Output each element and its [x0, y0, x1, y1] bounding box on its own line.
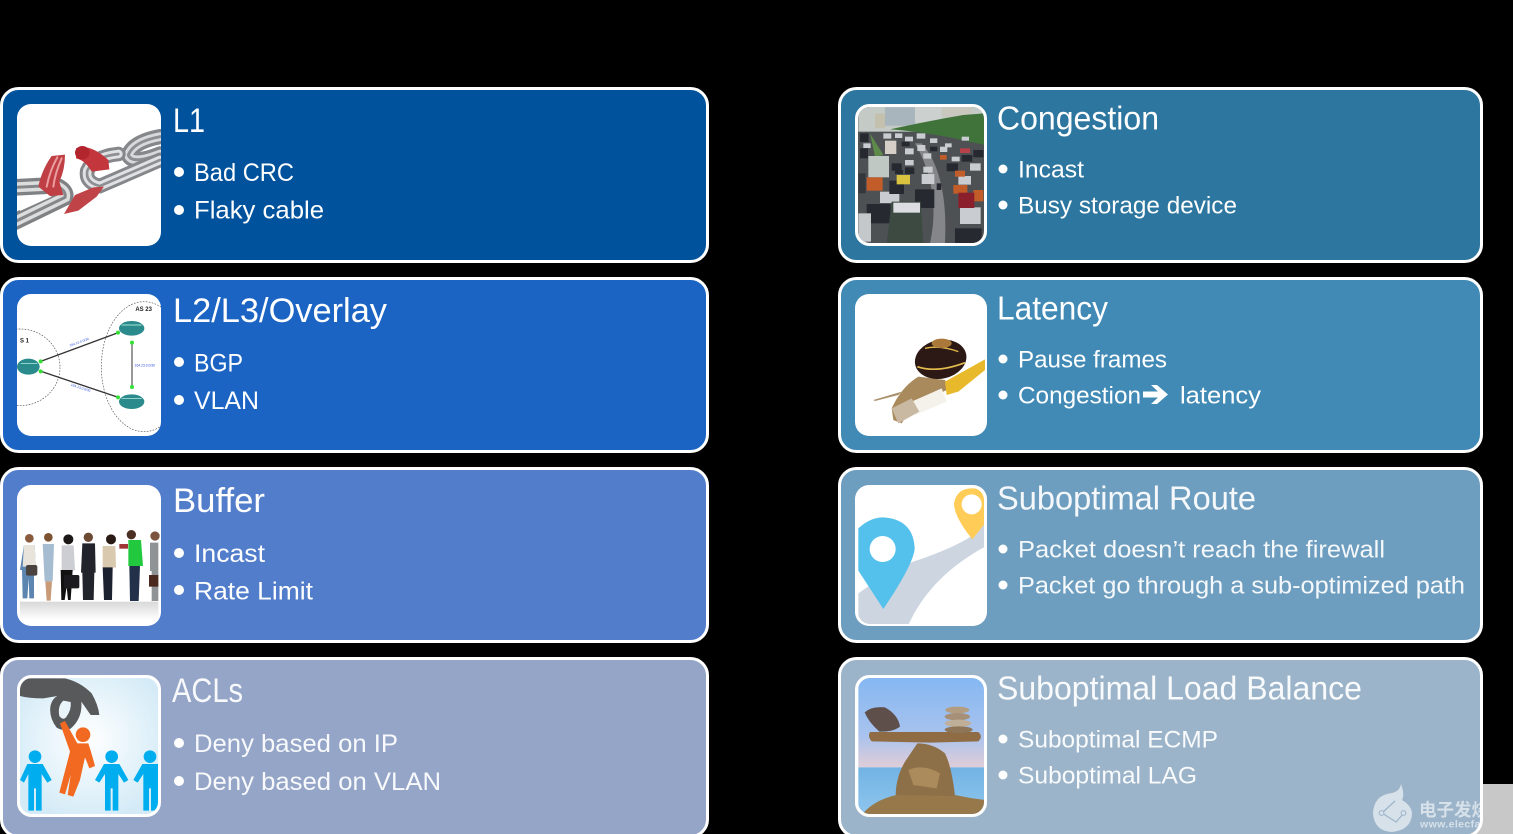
L2/L3 image: BGP network diagram: AS 23	[135, 307, 153, 313]
Congestion bullet list: Busy storage device	[1018, 192, 1237, 220]
L2/L3 image: BGP network diagram	[17, 294, 161, 436]
Latency image: snail on a network cable	[855, 294, 987, 436]
Suboptimal Route bullet list	[998, 536, 1465, 600]
Suboptimal Load Balance image: balanced rocks	[856, 676, 986, 816]
L2/L3 bullet list	[174, 350, 259, 415]
ACLs bullet list	[174, 730, 441, 796]
L2/L3 image: BGP network diagram: 164.13.0.0/30	[70, 383, 91, 393]
Buffer bullet list	[174, 540, 313, 606]
Suboptimal Load Balance title: Suboptimal Load Balance	[997, 670, 1362, 706]
Suboptimal Route card background	[840, 468, 1482, 642]
L1 bullet list: Flaky cable	[194, 196, 324, 224]
Latency card background	[840, 278, 1482, 452]
watermark text: 电子发烧友	[1419, 800, 1506, 820]
L2/L3 card background	[2, 278, 708, 452]
Latency bullet list: latency	[1180, 382, 1261, 410]
L2/L3 bullet list: BGP	[194, 350, 243, 378]
Latency bullet list: Congestion	[1018, 382, 1141, 410]
Buffer bullet list: Rate Limit	[194, 578, 313, 606]
panel: Congestion	[840, 88, 1482, 262]
L2/L3 title: L2/L3/Overlay	[173, 292, 387, 330]
L1 title: L1	[173, 102, 205, 140]
Suboptimal Load Balance card background	[840, 658, 1482, 834]
Congestion title: Congestion	[997, 100, 1159, 136]
L2/L3 image: BGP network diagram: 164.12.0.0/30	[69, 337, 90, 348]
Congestion bullet list	[998, 156, 1237, 220]
ACLs bullet list: Deny based on IP	[194, 730, 398, 758]
L1 card background	[2, 88, 708, 262]
Suboptimal Load Balance bullet list: Suboptimal ECMP	[1018, 726, 1218, 754]
panel: ACLs	[2, 658, 708, 834]
Buffer title: Buffer	[173, 482, 265, 520]
panel: Buffer	[2, 468, 708, 642]
L2/L3 bullet list: VLAN	[194, 387, 259, 415]
Latency bullet list	[998, 346, 1261, 410]
panel: Suboptimal Route	[840, 468, 1482, 642]
L1 bullet list	[174, 159, 324, 224]
Congestion image: traffic jam	[856, 106, 986, 244]
Latency bullet list: Pause frames	[1018, 346, 1167, 374]
Congestion bullet list: Incast	[1018, 156, 1084, 184]
Congestion card background	[840, 88, 1482, 262]
ACLs card background	[2, 658, 708, 834]
watermark corner block	[1470, 784, 1513, 834]
panel: Latency	[840, 278, 1482, 452]
Buffer bullet list: Incast	[194, 540, 265, 568]
ACLs image: hand picking a person	[18, 676, 160, 816]
ACLs bullet list: Deny based on VLAN	[194, 768, 441, 796]
Suboptimal Load Balance bullet list: Suboptimal LAG	[1018, 762, 1197, 790]
Buffer image: people queueing	[17, 485, 161, 626]
watermark logo	[1373, 784, 1412, 832]
Suboptimal Route bullet list: Packet go through a sub-optimized path	[1018, 572, 1465, 600]
panel: Suboptimal Load Balance	[840, 658, 1482, 834]
icon: arrow	[1143, 385, 1168, 404]
Suboptimal Load Balance bullet list	[998, 726, 1218, 790]
L2/L3 image: BGP network diagram: S 1	[20, 338, 30, 344]
watermark	[1373, 784, 1480, 832]
Latency title: Latency	[997, 290, 1108, 326]
ACLs title: ACLs	[172, 672, 243, 710]
panel: L1	[2, 88, 708, 262]
panel: L2/L3/Overlay	[0, 278, 708, 452]
Suboptimal Route image: map pins	[855, 485, 987, 626]
Buffer card background	[2, 468, 708, 642]
L1 bullet list: Bad CRC	[194, 159, 294, 187]
Suboptimal Route bullet list: Packet doesn’t reach the firewall	[1018, 536, 1385, 564]
Suboptimal Route title: Suboptimal Route	[997, 480, 1256, 516]
L2/L3 image: BGP network diagram: 164.23.0.0/30	[135, 364, 155, 368]
L1 image: broken chain	[15, 104, 161, 246]
